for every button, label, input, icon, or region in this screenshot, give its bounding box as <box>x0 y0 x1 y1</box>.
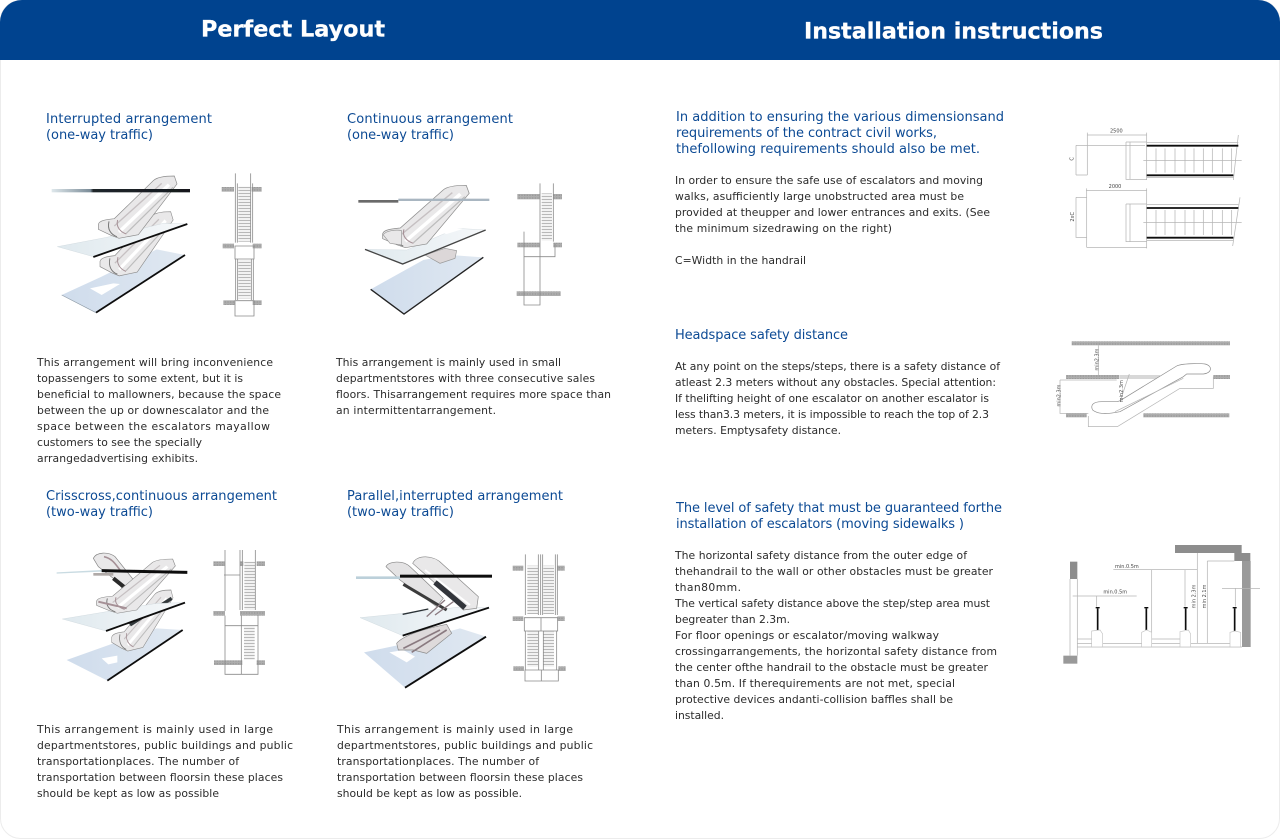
description: level of safety: begreater than 2.3m. <box>675 613 790 626</box>
description: requirements: C=Width in the handrail <box>675 254 806 267</box>
diagram: headspace section: min2.3m <box>1057 384 1063 407</box>
plan drawing: continuous <box>517 183 562 305</box>
heading: headspace: Headspace safety distance <box>675 328 848 343</box>
description: level of safety: installed. <box>675 709 724 722</box>
panel: continuous arrangement <box>335 112 611 417</box>
description: requirements <box>675 174 990 267</box>
description: crisscross: transportationplaces. The number of <box>37 755 239 768</box>
description: headspace: meters. Emptysafety distance. <box>675 424 841 437</box>
diagram: safety clearance section: min 2.1m <box>1202 584 1208 608</box>
description: level of safety: than 0.5m. If therequirements are not met, special <box>675 677 955 690</box>
description: crisscross: This arrangement is mainly used in large <box>36 723 273 736</box>
heading: requirements <box>676 110 1004 157</box>
heading: crisscross arrangement: Crisscross,continuous arrangement <box>46 489 277 504</box>
description: parallel <box>336 723 593 800</box>
description: parallel: transportationplaces. The number of <box>337 755 539 768</box>
description: level of safety: thehandrail to the wall or other obstacles must be greater <box>675 565 994 578</box>
description: crisscross: transportation between floorsin these places <box>37 771 283 784</box>
description: interrupted: arrangedadvertising exhibits. <box>37 452 198 465</box>
description: parallel: departmentstores, public buildings and public <box>337 739 593 752</box>
illustration: interrupted escalators <box>52 176 190 313</box>
description: headspace: less than3.3 meters, it is impossible to reach the top of 2.3 <box>675 408 989 421</box>
description: headspace <box>675 360 1000 437</box>
diagram: safety clearance section: min.0.5m <box>1115 564 1139 570</box>
description: parallel: transportation between floorsin these places <box>337 771 583 784</box>
description: crisscross: should be kept as low as possible <box>37 787 219 800</box>
illustration: crisscross escalators <box>57 553 187 681</box>
heading: level of safety <box>675 501 1002 532</box>
heading: level of safety: installation of escalators (moving sidewalks ) <box>676 517 964 532</box>
description: crisscross: departmentstores, public buildings and public <box>37 739 293 752</box>
heading: interrupted arrangement <box>46 112 212 143</box>
description: parallel: should be kept as low as possible. <box>337 787 522 800</box>
heading: interrupted arrangement: (one-way traffic) <box>46 128 153 143</box>
header band <box>0 0 1280 60</box>
description: level of safety: The vertical safety distance above the step/step area must <box>674 597 990 610</box>
heading: parallel arrangement <box>347 489 563 520</box>
description: continuous <box>335 356 611 417</box>
description: interrupted: between the up or downescalator and the <box>37 404 269 417</box>
description: continuous: This arrangement is mainly used in small <box>335 356 561 369</box>
heading: continuous arrangement: (one-way traffic) <box>347 128 454 143</box>
diagram: minimum area plan: 2xC <box>1070 212 1076 222</box>
title: Installation instructions: Installation instructions <box>804 20 1103 44</box>
diagram: minimum area plan: 2000 <box>1109 184 1121 190</box>
panel: headspace safety distance <box>675 328 1230 437</box>
description: headspace: If thelifting height of one escalator on another escalator is <box>675 392 989 405</box>
description: requirements: provided at theupper and lower entrances and exits. (See <box>675 206 990 219</box>
description: headspace: atleast 2.3 meters without any obstacles. Special attention: <box>675 376 996 389</box>
plan drawing: parallel <box>513 554 566 681</box>
description: level of safety: the center ofthe handrail to the obstacle must be greater <box>675 661 989 674</box>
diagram: safety clearance section: min 2.3m <box>1192 584 1198 608</box>
panel: interrupted arrangement <box>36 112 281 465</box>
description: level of safety: crossingarrangements, the horizontal safety distance from <box>675 645 997 658</box>
description: level of safety <box>674 549 997 722</box>
heading: continuous arrangement <box>347 112 513 143</box>
diagram: minimum area plan: C <box>1069 157 1075 161</box>
diagram: minimum area plan: 2500 <box>1110 128 1123 134</box>
heading: requirements: thefollowing requirements should also be met. <box>676 142 980 157</box>
heading: level of safety: The level of safety that must be guaranteed forthe <box>675 501 1002 516</box>
heading: continuous arrangement: Continuous arrangement <box>347 112 513 127</box>
diagram: safety clearance section <box>1063 545 1260 664</box>
description: interrupted <box>36 356 281 465</box>
illustration: continuous escalators <box>358 185 489 314</box>
diagram: safety clearance section: min.0.5m <box>1103 590 1127 596</box>
illustration: parallel escalators <box>356 557 492 688</box>
description: parallel: This arrangement is mainly used in large <box>336 723 573 736</box>
description: interrupted: customers to see the specially <box>37 436 203 449</box>
heading: parallel arrangement: Parallel,interrupted arrangement <box>347 489 563 504</box>
description: requirements: walks, asufficiently large unobstructed area must be <box>675 190 964 203</box>
description: continuous: floors. Thisarrangement requires more space than <box>336 388 611 401</box>
heading: parallel arrangement: (two-way traffic) <box>347 505 454 520</box>
description: interrupted: space between the escalators mayallow <box>37 420 270 433</box>
panel: crisscross arrangement <box>36 489 293 800</box>
description: interrupted: This arrangement will bring inconvenience <box>36 356 273 369</box>
title: Perfect Layout: Perfect Layout <box>201 18 385 42</box>
plan drawing: interrupted <box>222 173 262 316</box>
heading: interrupted arrangement: Interrupted arrangement <box>46 112 212 127</box>
panel: dimensions requirements <box>675 110 1242 267</box>
panel: level of safety <box>674 501 1260 722</box>
description: continuous: departmentstores with three consecutive sales <box>336 372 595 385</box>
description: level of safety: The horizontal safety distance from the outer edge of <box>674 549 967 562</box>
description: level of safety: than80mm. <box>675 581 741 594</box>
heading: crisscross arrangement <box>46 489 277 520</box>
heading: requirements: requirements of the contract civil works, <box>676 126 937 141</box>
description: interrupted: topassengers to some extent, but it is <box>37 372 243 385</box>
diagram: minimum area plan <box>1069 128 1242 248</box>
description: requirements: In order to ensure the safe use of escalators and moving <box>675 174 983 187</box>
heading: crisscross arrangement: (two-way traffic) <box>46 505 153 520</box>
description: interrupted: beneficial to mallowners, because the space <box>37 388 281 401</box>
description: requirements: the minimum sizedrawing on the right) <box>675 222 892 235</box>
description: level of safety: For floor openings or escalator/moving walkway <box>675 629 940 642</box>
description: continuous: an intermittentarrangement. <box>336 404 496 417</box>
description: headspace: At any point on the steps/steps, there is a safety distance of <box>675 360 1000 373</box>
diagram: headspace section: min2.3m <box>1119 380 1125 402</box>
plan drawing: crisscross <box>213 550 265 674</box>
description: level of safety: protective devices andanti-collision baffles shall be <box>675 693 953 706</box>
diagram: headspace section: min2.3m <box>1095 348 1101 371</box>
heading: requirements: In addition to ensuring the various dimensionsand <box>676 110 1004 125</box>
panel: parallel arrangement <box>336 489 593 800</box>
diagram: headspace section <box>1057 341 1230 427</box>
description: crisscross <box>36 723 293 800</box>
